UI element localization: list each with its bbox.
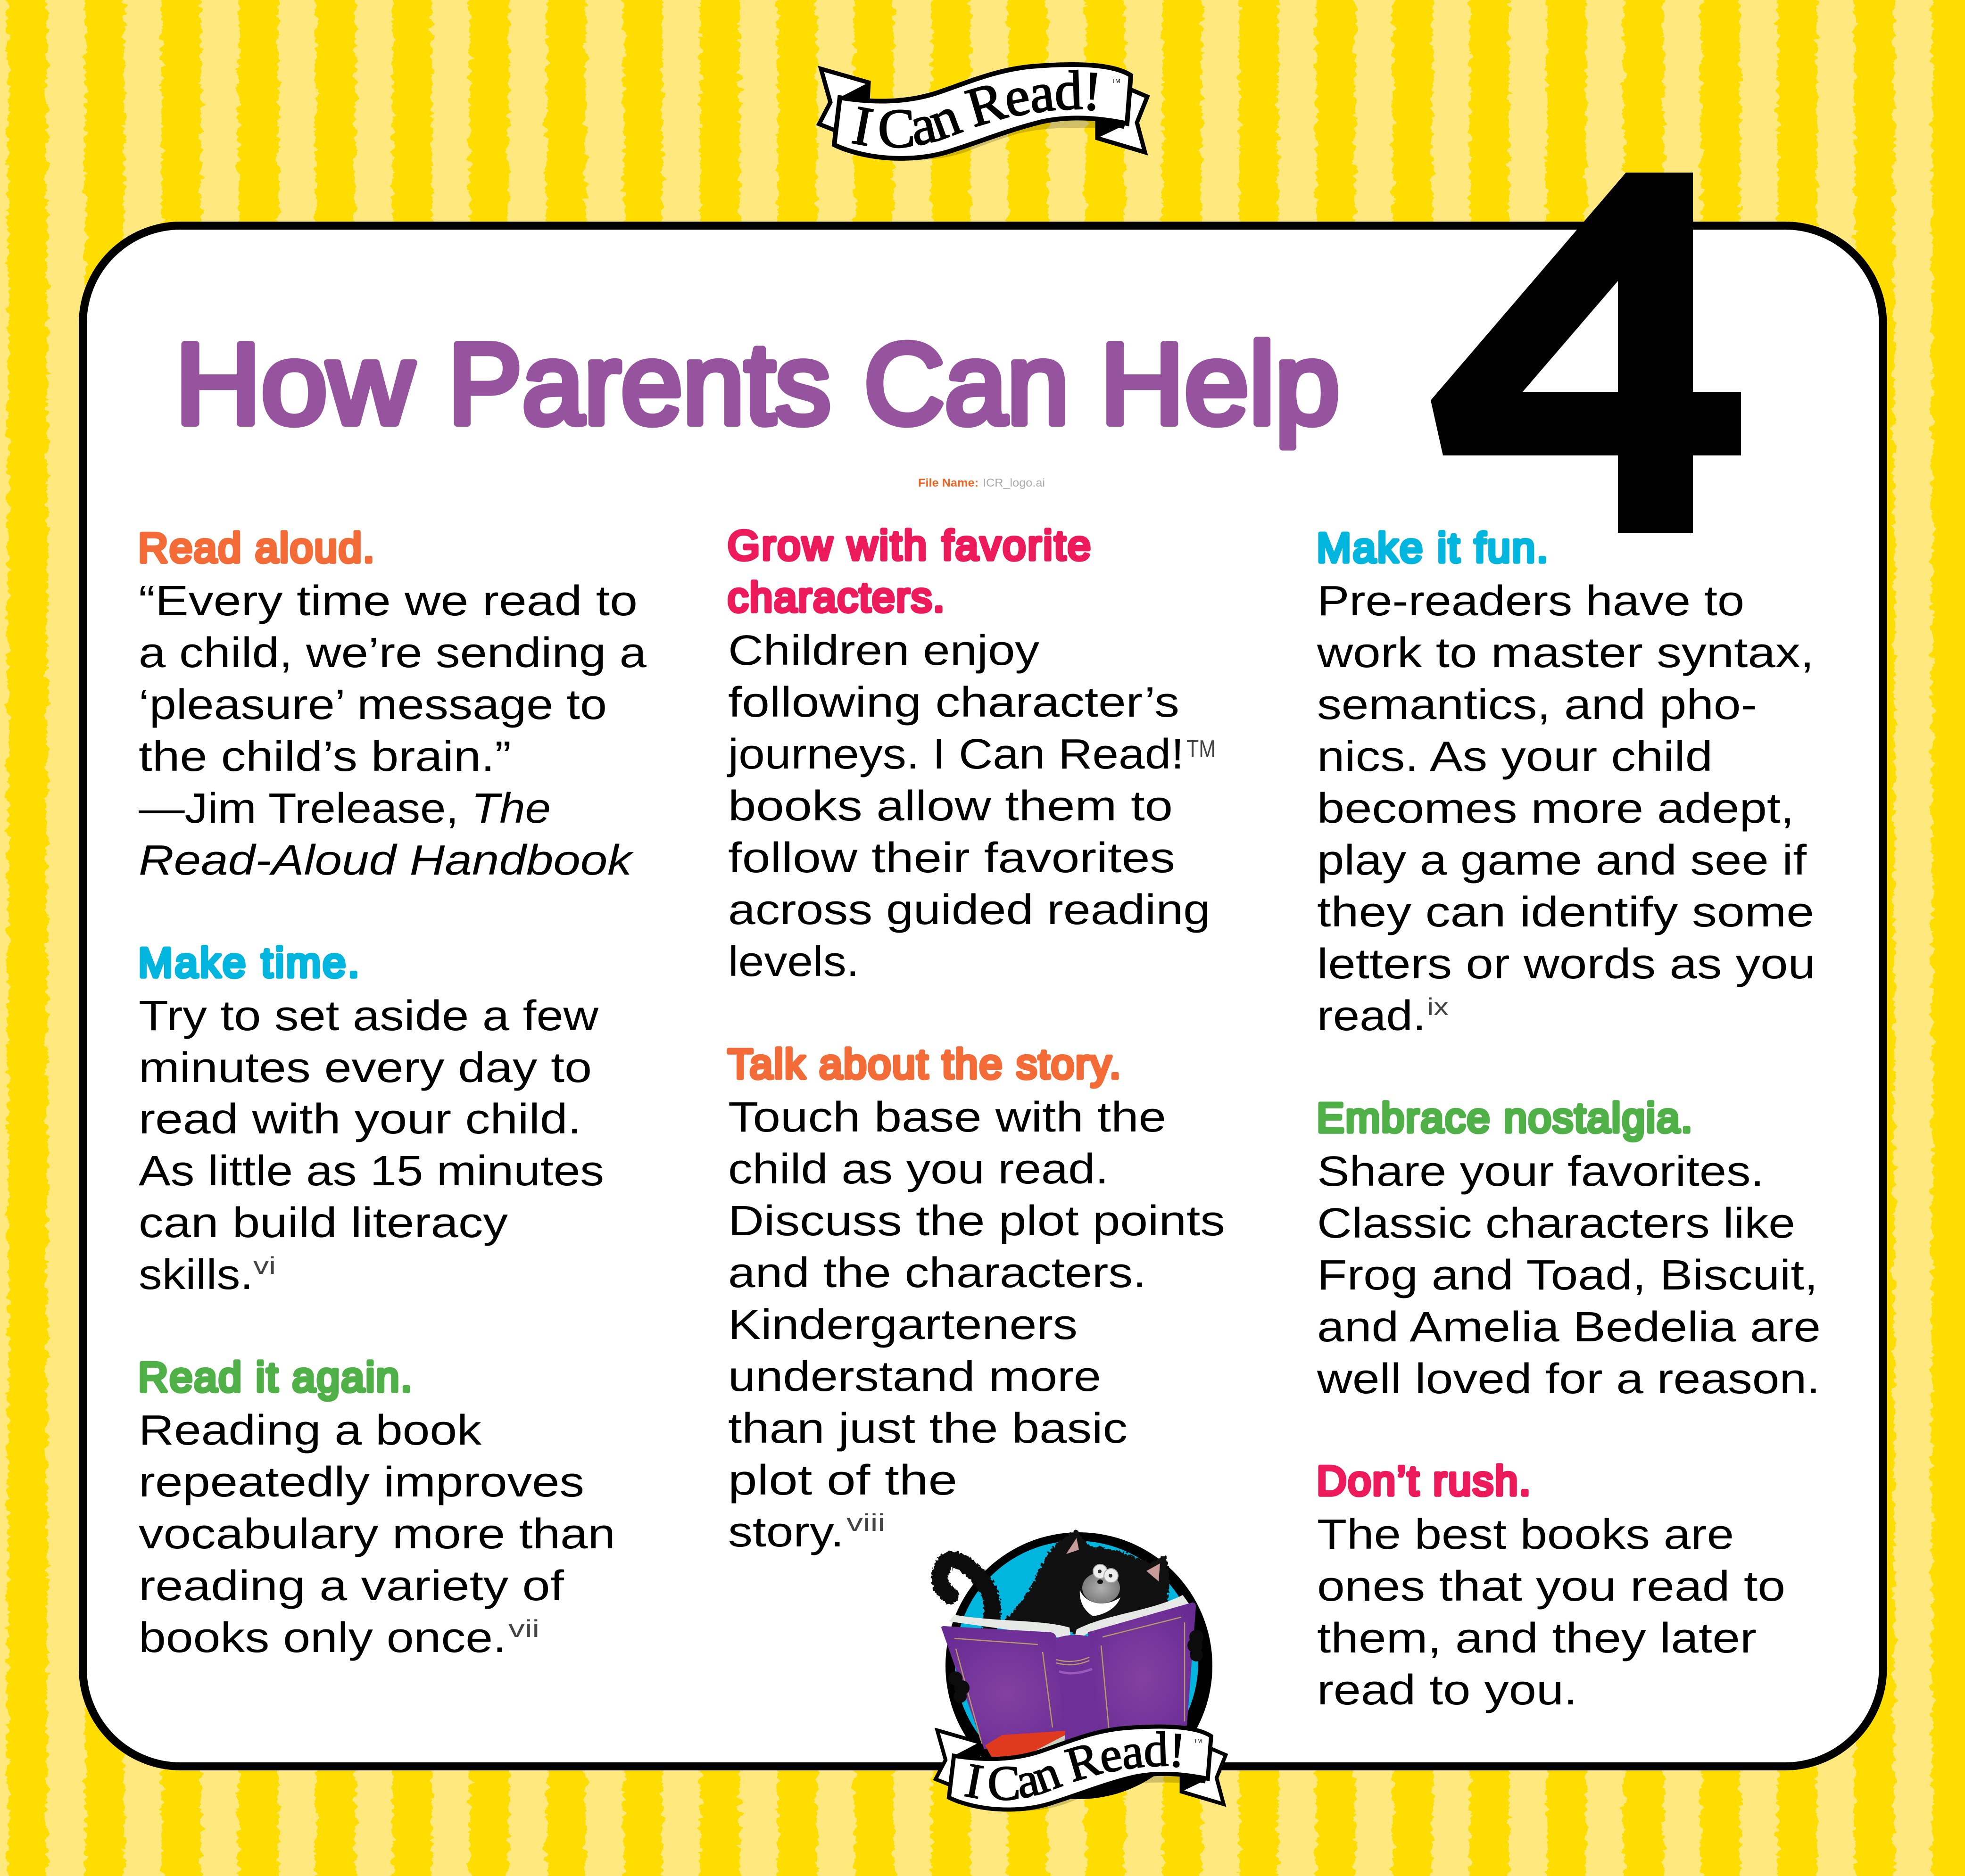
section: Read aloud: “Every time we read to	[139, 578, 638, 625]
section: Make it fun: they can identify some	[1317, 889, 1814, 936]
section: Talk about the story: story.	[728, 1509, 844, 1556]
file name note: ICR_logo.ai	[983, 477, 1045, 489]
section: Grow with favorite characters: Children enjoy	[728, 627, 1039, 674]
section: Talk about the story: child as you read.	[728, 1146, 1109, 1193]
logo: I Can Read! top ribbon: I Can Read!	[848, 59, 1103, 160]
section: Embrace nostalgia	[1317, 1094, 1821, 1403]
section: Read aloud: the child’s brain.”	[139, 733, 511, 780]
icon: red book	[985, 1731, 1073, 1763]
section: Embrace nostalgia: and Amelia Bedelia are	[1317, 1304, 1821, 1351]
section: Don't rush: them, and they later	[1317, 1615, 1757, 1662]
title	[175, 319, 1340, 448]
section: Don't rush	[1317, 1457, 1785, 1714]
icon: cat face	[1066, 1538, 1160, 1616]
section: Embrace nostalgia: Embrace nostalgia.	[1317, 1094, 1692, 1141]
section: Talk about the story: Discuss the plot points	[728, 1198, 1225, 1245]
section: Read it again: vocabulary more than	[139, 1511, 615, 1558]
section: Talk about the story: Kindergarteners	[728, 1301, 1078, 1348]
title: Help	[1100, 319, 1340, 448]
section: Grow with favorite characters: following character’s	[728, 679, 1179, 726]
section: Grow with favorite characters: Grow with favorite	[728, 522, 1091, 569]
section: Grow with favorite characters: across guided reading	[728, 886, 1211, 934]
section: Read it again: Reading a book	[139, 1407, 482, 1454]
icon: paws	[948, 1630, 1203, 1703]
section: Talk about the story: Touch base with the	[728, 1094, 1166, 1141]
section: Read aloud: ‘pleasure’ message to	[139, 681, 607, 728]
section: Embrace nostalgia: well loved for a reason.	[1317, 1355, 1820, 1403]
section: Read it again: repeatedly improves	[139, 1459, 584, 1506]
section: Talk about the story: Talk about the story.	[728, 1041, 1121, 1087]
section: Embrace nostalgia: Classic characters like	[1317, 1200, 1795, 1247]
section: Make it fun: Make it fun.	[1317, 524, 1548, 571]
section: Grow with favorite characters	[727, 522, 1216, 985]
section: Read it again: Read it again.	[138, 1354, 412, 1400]
badge: cat reading a purple book	[940, 1530, 1212, 1799]
section: Make time	[138, 939, 604, 1298]
section: Embrace nostalgia: Frog and Toad, Biscuit,	[1317, 1252, 1818, 1299]
logo: I Can Read! bottom ribbon: TM	[1194, 1739, 1202, 1744]
section: Make time: can build literacy	[139, 1199, 508, 1247]
icon: book covers	[941, 1603, 1196, 1749]
logo: I Can Read! bottom ribbon: I Can Read!	[961, 1722, 1186, 1811]
section: Make time: minutes every day to	[139, 1044, 592, 1091]
section: Read aloud: a child, we’re sending a	[139, 629, 647, 677]
section: Make time: Try to set aside a few	[139, 992, 599, 1040]
section: Make it fun: nics. As your child	[1317, 733, 1713, 780]
section: Make it fun: play a game and see if	[1317, 837, 1807, 884]
section: Read it again: reading a variety of	[139, 1562, 564, 1610]
icon: book pages	[949, 1595, 1190, 1643]
section: Make time: read with your child.	[139, 1096, 581, 1143]
section: Embrace nostalgia: Share your favorites.	[1317, 1148, 1764, 1195]
section: Don't rush: Don’t rush.	[1317, 1457, 1531, 1504]
logo: I Can Read! top ribbon: TM	[1111, 77, 1120, 84]
section: Grow with favorite characters: journeys. I Can Read!	[727, 731, 1184, 778]
title: Can	[864, 319, 1069, 448]
section: Read aloud: Read aloud.	[138, 524, 374, 571]
section: Read aloud: Read-Aloud Handbook	[139, 837, 634, 884]
section: Make it fun	[1317, 524, 1816, 1040]
section: Make it fun: work to master syntax,	[1317, 629, 1814, 677]
title: How	[175, 319, 414, 448]
section: Don't rush: The best books are	[1317, 1511, 1734, 1558]
icon: cat	[940, 1530, 1169, 1634]
section: Talk about the story: and the characters.	[728, 1249, 1146, 1297]
section: Make it fun: becomes more adept,	[1317, 785, 1794, 832]
section: Grow with favorite characters: books allow them to	[728, 783, 1173, 830]
section: Make it fun: Pre-readers have to	[1317, 578, 1744, 625]
section: Grow with favorite characters: follow their favorites	[728, 835, 1175, 882]
section: Read it again: books only once.	[139, 1614, 506, 1661]
big number 4	[1431, 173, 1741, 533]
section: Make time: Make time.	[138, 939, 359, 986]
section: Make it fun: semantics, and pho-	[1317, 681, 1757, 728]
section: Read aloud: —Jim Trelease, The	[139, 785, 551, 832]
title: Parents	[448, 319, 831, 448]
section: Make it fun: ix	[1427, 993, 1449, 1021]
section: Read aloud	[138, 524, 647, 884]
section: Read it again	[138, 1354, 615, 1661]
section: Grow with favorite characters: TM	[1186, 736, 1216, 763]
section: Talk about the story: than just the basic	[728, 1405, 1128, 1452]
section: Make it fun: read.	[1317, 992, 1426, 1040]
section: Talk about the story	[728, 1041, 1225, 1556]
section: Talk about the story: understand more	[728, 1353, 1101, 1400]
section: Make time: As little as 15 minutes	[139, 1148, 604, 1195]
section: Don't rush: read to you.	[1317, 1667, 1577, 1714]
section: Make time: vi	[253, 1252, 276, 1280]
panel: white rounded card	[83, 225, 1883, 1766]
section: Read it again: vii	[508, 1615, 539, 1643]
section: Grow with favorite characters: characters.	[728, 574, 945, 620]
file name note	[918, 477, 1045, 489]
section: Make it fun: letters or words as you	[1317, 941, 1816, 988]
section: Talk about the story: plot of the	[728, 1457, 957, 1504]
section: Grow with favorite characters: levels.	[728, 938, 859, 985]
file name note: File Name:	[918, 477, 978, 489]
section: Don't rush: ones that you read to	[1317, 1563, 1785, 1610]
section: Make time: skills.	[139, 1251, 253, 1298]
section: Talk about the story: viii	[846, 1509, 885, 1537]
